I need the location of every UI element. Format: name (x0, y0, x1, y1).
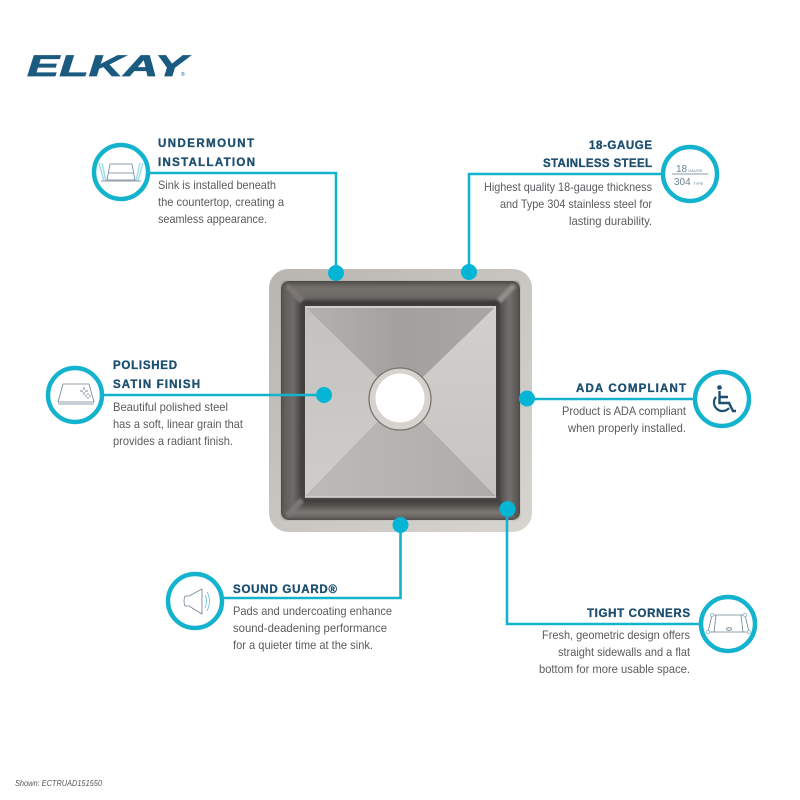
body text: provides a radiant finish. (113, 434, 233, 448)
logo: Elkay: ELKAY (27, 50, 192, 83)
logo: Elkay (27, 50, 192, 83)
connector line (469, 174, 663, 273)
logo: Elkay: ® (181, 71, 185, 78)
callout: sound guard (168, 517, 408, 652)
icon: undermount sink (94, 145, 148, 199)
connector line (150, 173, 336, 273)
heading: UNDERMOUNT (158, 138, 254, 150)
body text: Pads and undercoating enhance (233, 604, 392, 618)
body text: sound-deadening performance (233, 621, 387, 635)
heading (158, 138, 255, 169)
icon: polished surface (48, 368, 102, 422)
body text (113, 400, 244, 448)
heading: SOUND GUARD® (233, 584, 338, 596)
icon: 18 gauge 304 type: TYPE (693, 181, 704, 186)
marker dot (316, 387, 332, 403)
heading: STAINLESS STEEL (543, 158, 652, 170)
footnote: model number: Shown: ECTRUAD151550 (15, 778, 102, 788)
heading (113, 360, 200, 391)
body text: Product is ADA compliant (562, 404, 687, 418)
icon: 18 gauge 304 type: GAUGE (688, 168, 703, 173)
body text: Fresh, geometric design offers (542, 628, 690, 642)
body text: and Type 304 stainless steel for (500, 197, 652, 211)
callout: 18-gauge stainless steel (461, 140, 717, 280)
icon: 18 gauge 304 type: 18 (676, 164, 688, 175)
body text: bottom for more usable space. (539, 662, 690, 676)
body text: seamless appearance. (158, 212, 267, 226)
marker dot (500, 501, 516, 517)
connector line (527, 398, 694, 400)
heading: SATIN FINISH (113, 379, 200, 391)
connector line (104, 394, 324, 396)
connector line (507, 509, 700, 624)
callout: undermount installation (94, 138, 344, 281)
icon: speaker (168, 574, 222, 628)
body text (233, 604, 392, 652)
icon: 18 gauge 304 type: 304 (674, 177, 691, 188)
drain (369, 368, 431, 430)
body text: straight sidewalls and a flat (558, 645, 691, 659)
icon: sink corners (701, 597, 755, 651)
body text (484, 180, 652, 228)
body text: for a quieter time at the sink. (233, 638, 373, 652)
callout: polished satin finish (48, 360, 332, 448)
body text: Highest quality 18-gauge thickness (484, 180, 652, 194)
marker dot (519, 390, 535, 406)
connector line (224, 525, 400, 598)
heading: 18-GAUGE (589, 140, 652, 152)
body text (539, 628, 691, 676)
marker dot (392, 517, 408, 533)
callout: tight corners (500, 501, 755, 676)
body text: Sink is installed beneath (158, 178, 276, 192)
marker dot (328, 265, 344, 281)
callout: ADA compliant (519, 372, 749, 435)
marker dot (461, 264, 477, 280)
body text: lasting durability. (569, 214, 652, 228)
body text (562, 404, 687, 435)
heading: ADA COMPLIANT (576, 383, 686, 395)
body text: Beautiful polished steel (113, 400, 228, 414)
heading (543, 140, 652, 170)
heading: TIGHT CORNERS (587, 608, 690, 620)
heading: POLISHED (113, 360, 177, 372)
icon: wheelchair (695, 372, 749, 426)
body text: the countertop, creating a (158, 195, 284, 209)
body text: when properly installed. (567, 421, 686, 435)
body text (158, 178, 284, 226)
heading: INSTALLATION (158, 157, 255, 169)
icon: 18 gauge 304 type (663, 147, 717, 201)
body text: has a soft, linear grain that (113, 417, 244, 431)
sink photo (269, 269, 532, 532)
